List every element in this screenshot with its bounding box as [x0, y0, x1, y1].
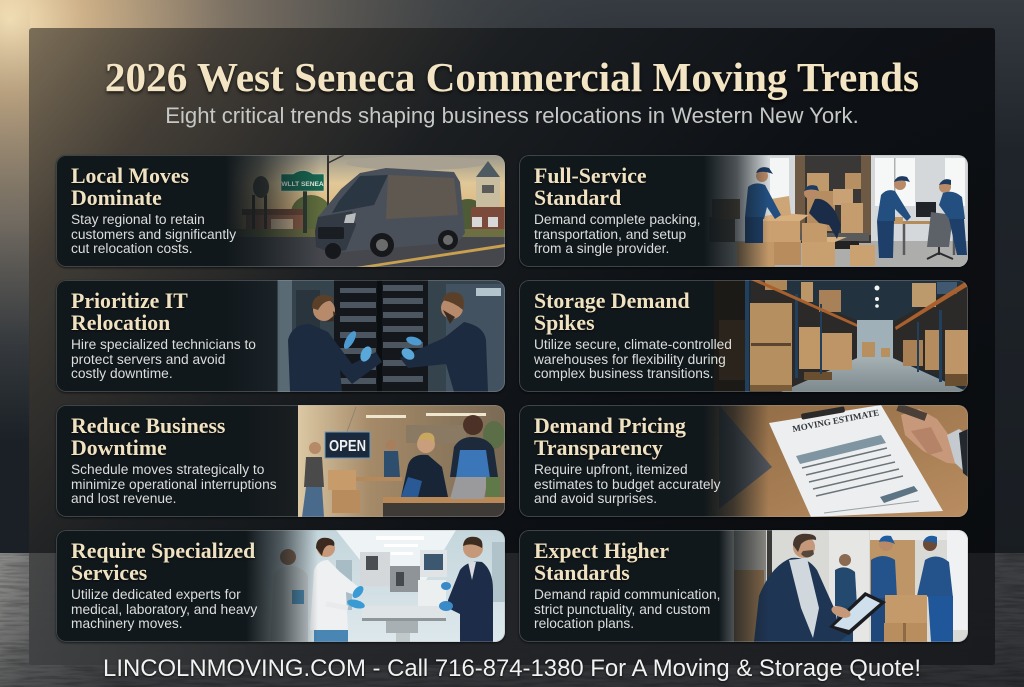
- body text: complex business transitions.: [534, 366, 714, 381]
- body text: cut relocation costs.: [71, 241, 193, 256]
- panel: Prioritize IT Relocation: [56, 280, 505, 392]
- heading: Standard: [534, 186, 621, 210]
- panel: Local Moves Dominate: [56, 155, 505, 267]
- icon: tablet: [829, 592, 886, 635]
- panel: Reduce Business Downtime: [56, 405, 505, 517]
- photo: medical equipment move: [250, 530, 505, 642]
- heading: [534, 414, 686, 460]
- icon: mover 3: [877, 176, 911, 258]
- heading: Storage Demand: [534, 289, 690, 313]
- icon: right technician: [399, 292, 488, 392]
- body text: protect servers and avoid: [71, 352, 225, 366]
- heading: Standards: [534, 561, 630, 585]
- icon: man in suit: [439, 537, 493, 642]
- body text: Utilize dedicated experts for: [71, 587, 241, 602]
- lower panel band over the floor: [29, 553, 995, 665]
- photo: moving estimate on a wooden desk: [710, 405, 968, 517]
- heading: [534, 164, 647, 210]
- icon: mover with cap: [917, 536, 953, 642]
- body text: minimize operational interruptions: [71, 476, 277, 492]
- icon: estimate document: MOVING ESTIMATE: [791, 407, 880, 434]
- icon: truck with cartons: [795, 155, 871, 249]
- body text: from a single provider.: [534, 241, 669, 256]
- heading: [71, 289, 188, 335]
- body text: [534, 462, 720, 506]
- body text: [71, 587, 258, 631]
- icon: handshake: [896, 403, 968, 477]
- icon: carton stack: [884, 595, 927, 642]
- body text: [71, 212, 236, 256]
- panel: Expect Higher Standards: [519, 530, 968, 642]
- photo: manager with tablet and movers: [721, 530, 968, 642]
- heading: [71, 414, 225, 460]
- body text: Demand complete packing,: [534, 212, 701, 227]
- body text: relocation plans.: [534, 616, 634, 631]
- heading: [71, 164, 189, 210]
- body text: and avoid surprises.: [534, 491, 657, 506]
- body text: Hire specialized technicians to: [71, 337, 256, 352]
- body text: transportation, and setup: [534, 226, 686, 242]
- body text: warehouses for flexibility during: [534, 352, 726, 366]
- body text: machinery moves.: [71, 616, 183, 631]
- icon: manager in suit: [754, 534, 849, 642]
- icon: mover 4: [939, 179, 967, 255]
- subtitle: Eight critical trends shaping business relocations in Western New York.: [165, 103, 859, 128]
- icon: nurse: [310, 538, 366, 642]
- photo: warehouse aisle with pallet racks: [714, 280, 968, 392]
- icon: left staff member: [302, 442, 324, 517]
- body text: [534, 587, 720, 631]
- body text: Utilize secure, climate-controlled: [534, 337, 732, 352]
- body text: [534, 212, 701, 256]
- icon: equipment cart: [360, 550, 447, 642]
- body text: customers and significantly: [71, 226, 236, 242]
- body text: [71, 337, 256, 381]
- heading: [534, 289, 690, 336]
- heading: Reduce Business: [71, 414, 225, 438]
- photo: van on West Seneca street: [232, 155, 505, 267]
- panel: Require Specialized Services: [56, 530, 505, 642]
- icon: left technician: [288, 295, 382, 392]
- icon: desk and office chair: [885, 202, 961, 259]
- body text: [71, 462, 277, 506]
- heading: [71, 539, 255, 585]
- body text: Demand rapid communication,: [534, 587, 720, 602]
- icon: seated woman: [401, 433, 448, 497]
- body text: medical, laboratory, and heavy: [71, 602, 257, 616]
- body text: Require upfront, itemized: [534, 462, 688, 477]
- heading: Expect Higher: [534, 539, 669, 563]
- heading: Demand Pricing: [534, 414, 686, 438]
- icon: mover 2: [804, 185, 841, 239]
- panel: Full-Service Standard: [519, 155, 968, 267]
- icon: stacked cartons: [328, 470, 360, 513]
- body text: Stay regional to retain: [71, 212, 205, 227]
- icon: laptop: [450, 477, 488, 499]
- heading: Services: [71, 561, 147, 585]
- heading: Require Specialized: [71, 539, 255, 563]
- body text: [534, 337, 732, 381]
- icon: background mover: [384, 440, 400, 477]
- icon: carton stack: [737, 196, 875, 267]
- body text: costly downtime.: [71, 366, 173, 381]
- heading: [534, 539, 669, 585]
- icon: man with apron: [450, 415, 498, 478]
- heading: Downtime: [71, 436, 167, 460]
- body text: and lost revenue.: [71, 491, 176, 506]
- icon: left pallet rack: [745, 280, 857, 392]
- heading: Prioritize IT: [71, 289, 188, 313]
- icon: estimate document: [769, 405, 943, 517]
- photo: technicians at server racks: [260, 280, 505, 392]
- photo: movers packing and setting up an office: [708, 155, 968, 267]
- footer call to action: LINCOLNMOVING.COM - Call 716-874-1380 For A Moving & Storage Quote!: [103, 655, 921, 682]
- icon: laptop: [719, 405, 772, 509]
- heading: Spikes: [534, 311, 595, 335]
- icon: staff in lab coat: [270, 549, 308, 642]
- icon: town sign: [281, 170, 324, 233]
- body text: Schedule moves strategically to: [71, 462, 264, 477]
- icon: OPEN sign: [325, 407, 370, 458]
- icon: cargo van: [315, 168, 465, 259]
- title: 2026 West Seneca Commercial Moving Trends: [105, 54, 919, 100]
- heading: Local Moves: [71, 164, 189, 188]
- icon: right pallet rack: [893, 280, 968, 388]
- heading: Full-Service: [534, 164, 647, 188]
- panel: Storage Demand Spikes: [519, 280, 968, 392]
- body text: strict punctuality, and custom: [534, 602, 710, 616]
- heading: Relocation: [71, 311, 170, 335]
- panel: Demand Pricing Transparency: [519, 405, 968, 517]
- icon: background mover: [835, 554, 857, 642]
- body text: estimates to budget accurately: [534, 476, 720, 492]
- icon: mover 1: [745, 167, 781, 243]
- photo: office staying open during a move: [292, 405, 505, 517]
- icon: town sign: WLLT SENEA: [281, 181, 324, 188]
- icon: counter: [383, 497, 505, 517]
- icon: OPEN sign: OPEN: [329, 438, 366, 455]
- icon: server rack: [334, 280, 428, 392]
- heading: Transparency: [534, 436, 663, 460]
- heading: Dominate: [71, 186, 162, 210]
- icon: mover behind boxes: [871, 536, 897, 642]
